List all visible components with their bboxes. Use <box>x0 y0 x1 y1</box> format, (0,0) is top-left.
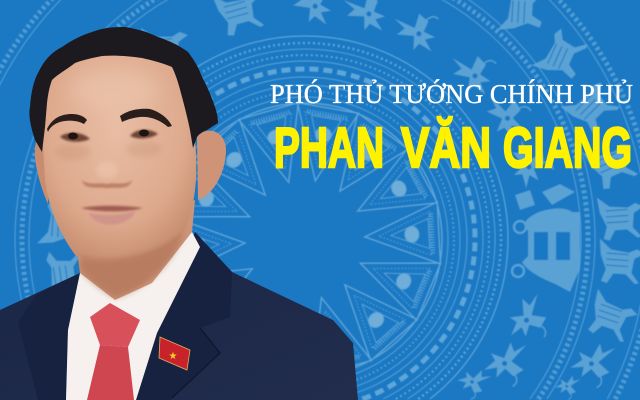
neck <box>74 200 195 300</box>
ears <box>35 131 226 204</box>
face shading <box>55 70 184 298</box>
boat house figure <box>512 184 580 292</box>
name heading: PHAN <box>274 116 384 180</box>
outer band figures <box>497 0 640 400</box>
shirt and collar <box>66 232 200 400</box>
suit jacket <box>0 232 358 400</box>
name heading <box>274 116 632 180</box>
hair <box>29 27 218 152</box>
flag pin: ★ <box>169 351 178 362</box>
eyes <box>60 130 158 142</box>
flag pin <box>159 337 190 370</box>
mouth <box>81 206 143 225</box>
portrait <box>0 27 358 400</box>
star triangles <box>192 101 442 366</box>
tie <box>87 303 140 400</box>
name heading: VĂN <box>401 116 491 180</box>
eyebrows <box>47 109 172 132</box>
subtitle: PHÓ THỦ TƯỚNG CHÍNH PHỦ <box>270 79 633 109</box>
nose <box>82 161 132 188</box>
face <box>42 42 196 260</box>
